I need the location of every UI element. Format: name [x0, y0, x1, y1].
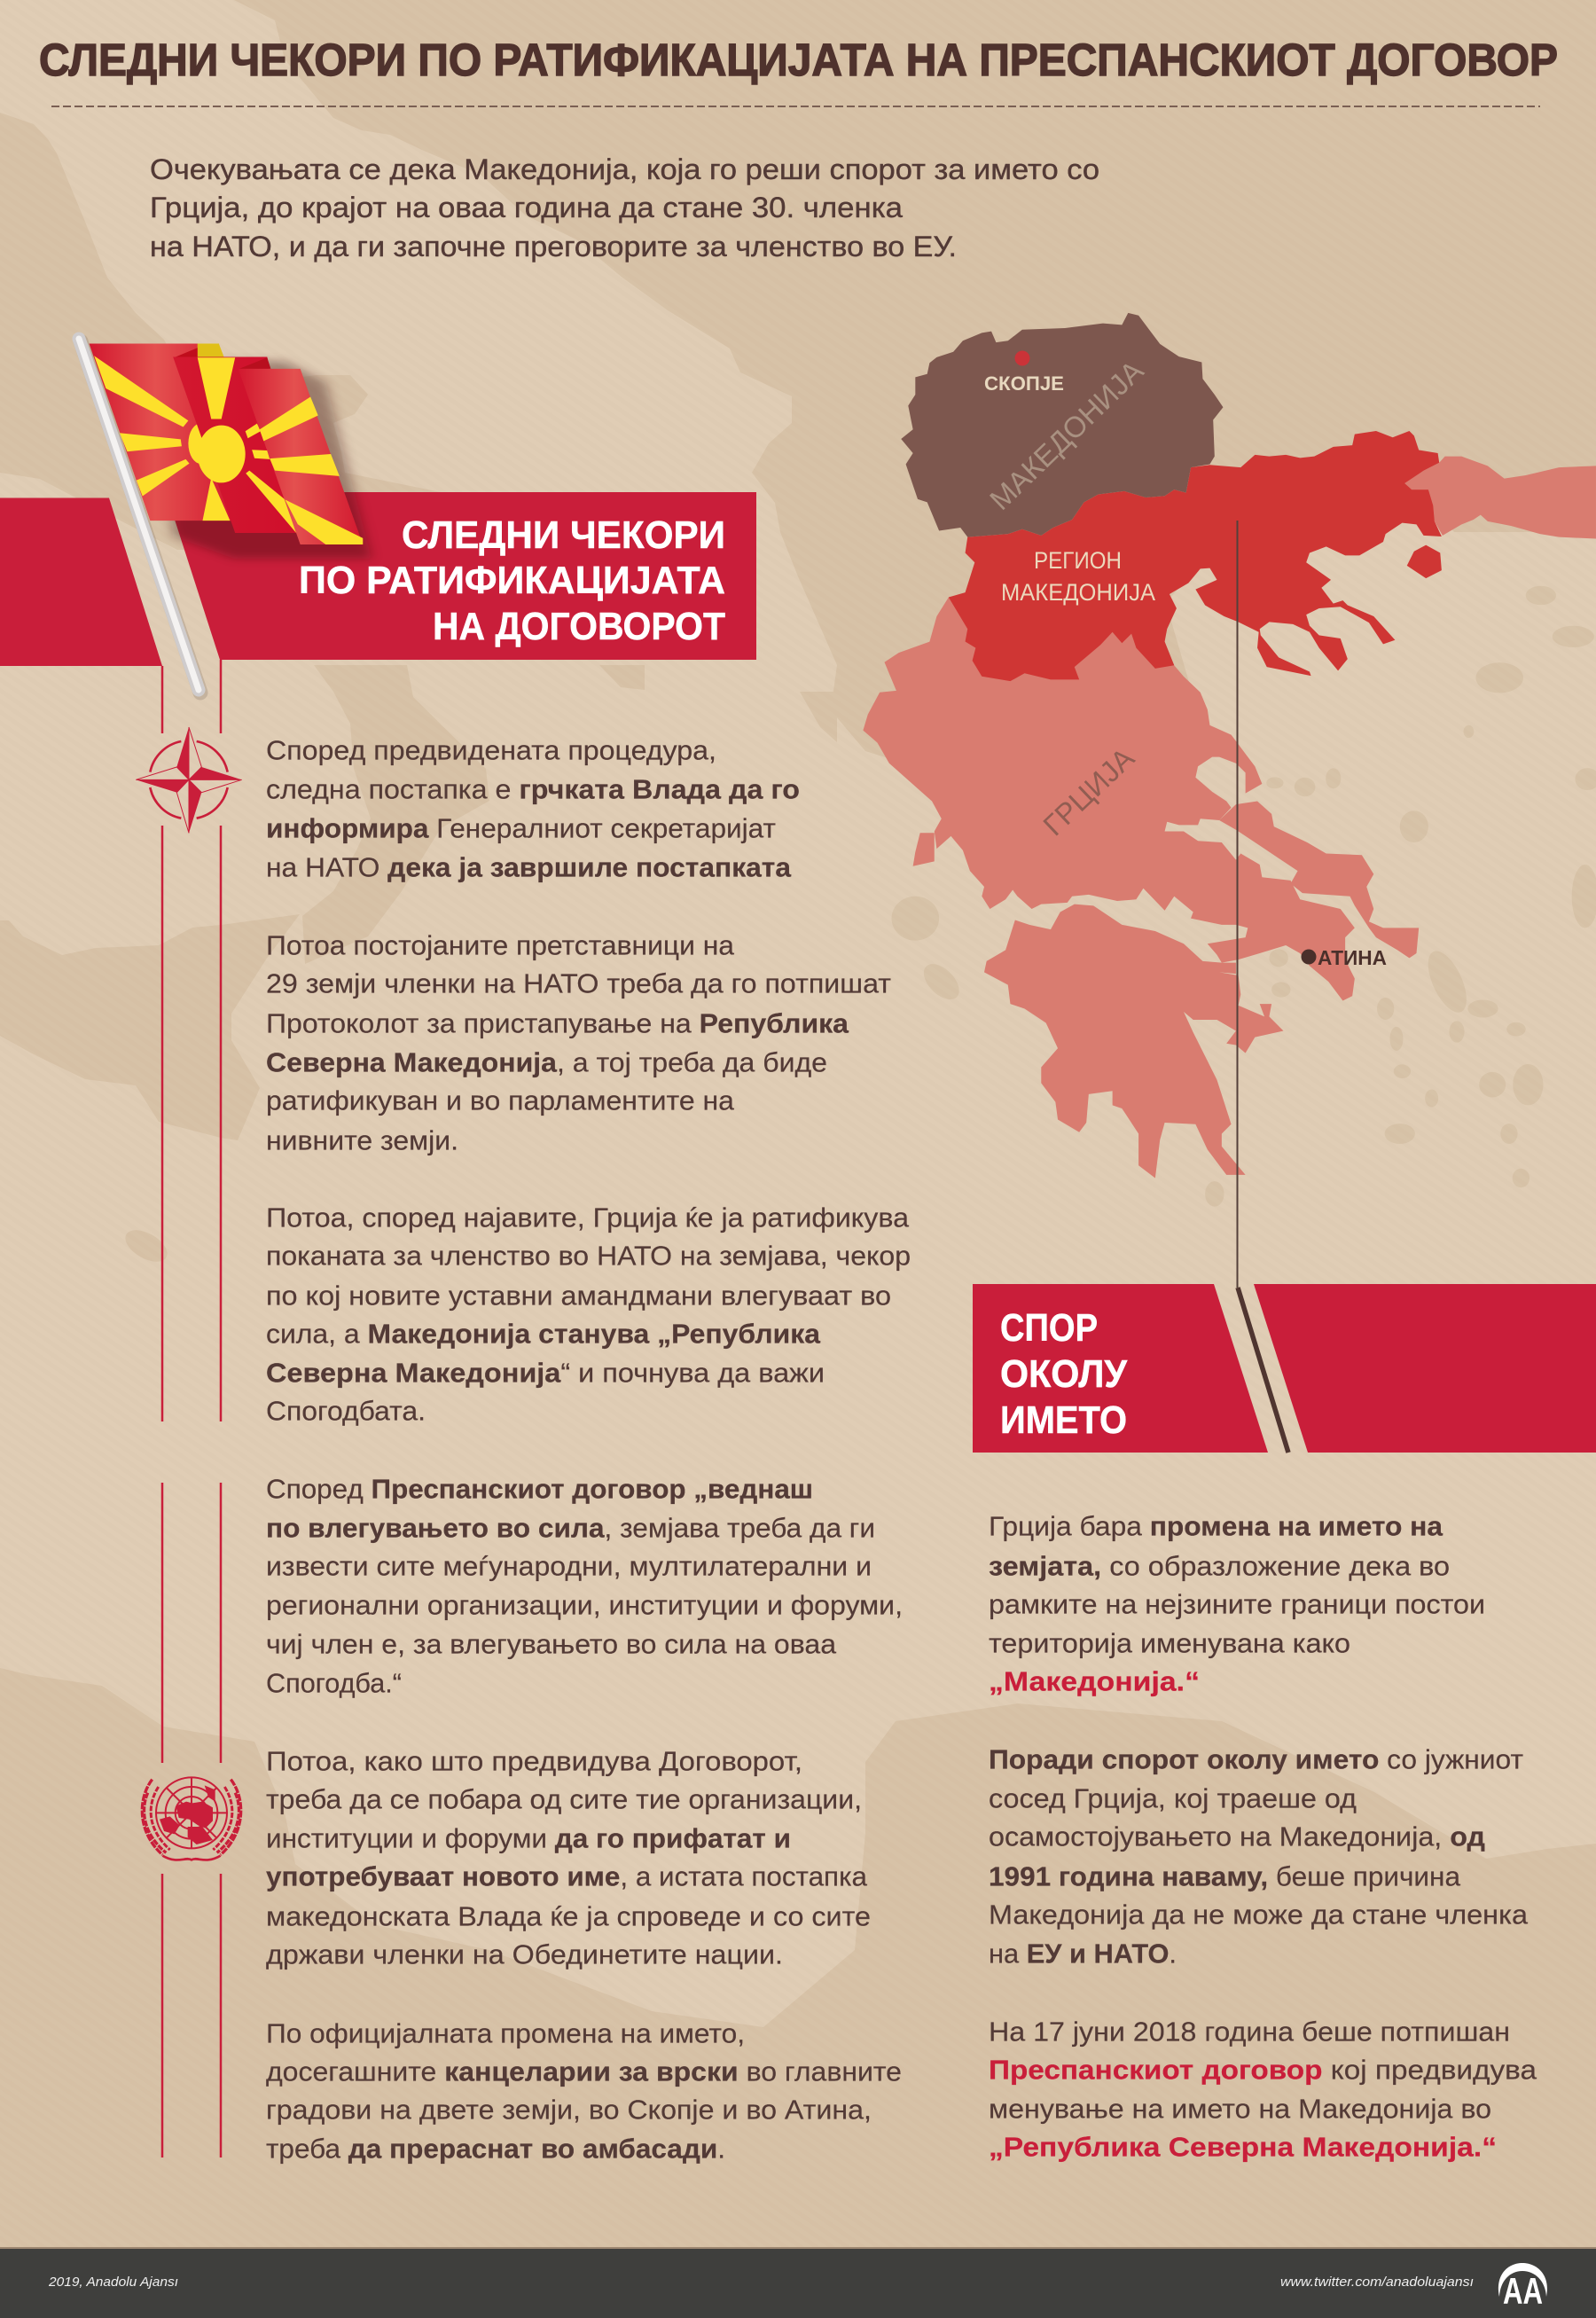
text block: procedure 4: Спогодба.“ — [266, 1667, 402, 1699]
intro text: Очекувањата се дека Македонија, која го реши спорот за името со — [150, 153, 1099, 185]
text block: procedure 4: чиј член е, за влегувањето во сила на оваа — [266, 1628, 837, 1660]
text block: procedure 5: институции и форуми да го прифатат и — [266, 1823, 791, 1853]
map: Greece and Thrace — [863, 583, 1419, 1179]
text block: procedure 3: Спогодбата. — [266, 1396, 426, 1426]
map: Macedonia — [901, 313, 1223, 537]
text block: procedure 2: Потоа постојаните претставници на — [266, 929, 735, 961]
text block: dispute 1: Грција бара промена на името на — [989, 1511, 1443, 1541]
text block: procedure 3: поканата за членство во НАТО на земјава, чекор — [266, 1240, 911, 1272]
text block: procedure 4 — [266, 1474, 903, 1699]
text block: procedure 5: Потоа, како што предвидува Договорот, — [266, 1745, 802, 1777]
heading: dispute over the name — [1000, 1306, 1128, 1442]
text block: dispute 2: Македонија да не може да стане членка — [989, 1899, 1529, 1930]
map label: Skopje: СКОПЈЕ — [984, 372, 1064, 395]
text block: dispute 3 — [989, 2017, 1537, 2162]
text block: procedure 2 — [266, 929, 891, 1156]
heading: next steps: СЛЕДНИ ЧЕКОРИ — [402, 513, 725, 557]
text block: procedure 5 — [266, 1745, 871, 1970]
footer credit: 2019, Anadolu Ajansı — [48, 2275, 178, 2290]
heading: dispute over the name: ОКОЛУ — [1000, 1352, 1128, 1396]
icon: United Nations emblem — [142, 1777, 241, 1860]
text block: procedure 1: Според предвидената процедура, — [266, 734, 716, 766]
text block: dispute 1: земјата, со образложение дека во — [989, 1550, 1450, 1582]
heading: dispute over the name: СПОР — [1000, 1306, 1098, 1350]
text block: procedure 3: по кој новите уставни амандмани влегуваат во — [266, 1280, 891, 1311]
text block: procedure 1: на НАТО дека ја завршиле постапката — [266, 851, 792, 883]
icon: Anadolu Agency logo: AA — [1503, 2270, 1543, 2312]
text block: dispute 2: осамостојувањето на Македонија, од — [989, 1821, 1485, 1852]
text block: procedure 6 — [266, 2018, 902, 2164]
intro text — [150, 153, 1099, 262]
text block: procedure 5: македонската Влада ќе ја спроведе и со сите — [266, 1901, 871, 1931]
text block: procedure 1 — [266, 734, 800, 883]
text block: procedure 6: досегашните канцеларии за врски во главните — [266, 2056, 902, 2087]
map label: Athens: АТИНА — [1318, 946, 1387, 969]
map label: region Macedonia — [1001, 547, 1155, 606]
text block: procedure 6: По официјалната промена на името, — [266, 2018, 745, 2048]
text block: dispute 2: Поради спорот околу името со јужниот — [989, 1743, 1523, 1775]
map label: Skopje — [984, 351, 1064, 395]
name dispute band — [973, 521, 1596, 1453]
text block: dispute 2: 1991 година наваму, беше причина — [989, 1860, 1461, 1892]
text block: procedure 1: следна постапка е грчката Влада да го — [266, 773, 800, 805]
text block: procedure 4: извести сите меѓународни, мултилатерални и — [266, 1550, 872, 1582]
text block: procedure 4: Според Преспанскиот договор „веднаш — [266, 1474, 813, 1504]
icon: NATO compass star — [136, 727, 242, 833]
heading: next steps — [299, 513, 725, 648]
icon: Anadolu Agency logo — [1498, 2263, 1547, 2312]
text block: procedure 3: Северна Македонија “ и почнува да важи — [266, 1357, 825, 1389]
footer url: www.twitter.com/anadoluajansı — [1280, 2275, 1474, 2290]
map — [863, 313, 1596, 1179]
heading: next steps: ПО РАТИФИКАЦИЈАТА — [299, 559, 725, 602]
text block: dispute 2 — [989, 1743, 1529, 1969]
text block: dispute 3: На 17 јуни 2018 година беше потпишан — [989, 2017, 1510, 2047]
text block: procedure 4: регионални организации, институции и форуми, — [266, 1589, 903, 1621]
text block: dispute 1: рамките на нејзините граници постои — [989, 1589, 1485, 1619]
text block: dispute 2: на ЕУ и НАТО. — [989, 1938, 1177, 1969]
intro text: на НАТО, и да ги започне преговорите за членство во ЕУ. — [150, 231, 957, 262]
text block: procedure 2: Протоколот за пристапување на Република — [266, 1007, 849, 1039]
footer bar — [0, 2247, 1596, 2318]
text block: dispute 3: „Република Северна Македонија.“ — [989, 2132, 1497, 2162]
text block: dispute 1: територија именувана како — [989, 1628, 1350, 1658]
text block: procedure 5: држави членки на Обединетите нации. — [266, 1938, 783, 1970]
text block: dispute 1: „Македонија.“ — [989, 1665, 1200, 1697]
text block: procedure 6: треба да прераснат во амбасади. — [266, 2134, 725, 2164]
text block: dispute 2: сосед Грција, кој траеше од — [989, 1782, 1357, 1814]
text block: procedure 2: ратификуван и во парламентите на — [266, 1085, 735, 1116]
text block: procedure 6: градови на двете земји, во Скопје и во Атина, — [266, 2095, 872, 2125]
text block: procedure 2: Северна Македонија , а тој треба да биде — [266, 1046, 827, 1078]
intro text: Грција, до крајот на оваа година да стане 30. членка — [150, 192, 903, 223]
text block: procedure 5: треба да се побара од сите тие организации, — [266, 1784, 862, 1814]
heading: next steps: НА ДОГОВОРОТ — [433, 605, 725, 648]
text block: procedure 3: Потоа, според најавите, Грција ќе ја ратификува — [266, 1202, 910, 1233]
text block: procedure 3 — [266, 1202, 911, 1426]
text block: procedure 5: употребуваат новото име, а истата постапка — [266, 1860, 868, 1892]
flag of Macedonia with pole — [79, 339, 372, 693]
text block: procedure 1: информира Генералниот секретаријат — [266, 812, 776, 844]
map label: Macedonia country: МАКЕДОНИЈА — [983, 354, 1149, 516]
map label: region Macedonia: РЕГИОН — [1034, 547, 1122, 574]
heading: dispute over the name: ИМЕТО — [1000, 1398, 1127, 1442]
text block: dispute 3: Преспанскиот договор кој предвидува — [989, 2054, 1537, 2086]
text block: dispute 3: менување на името на Македонија во — [989, 2093, 1491, 2125]
text block: dispute 1 — [989, 1511, 1485, 1697]
red header band — [0, 492, 756, 666]
text block: procedure 2: 29 земји членки на НАТО треба да го потпишат — [266, 968, 891, 998]
text block: procedure 4: по влегувањето во сила, земјава треба да ги — [266, 1513, 875, 1543]
map label: region Macedonia: МАКЕДОНИЈА — [1001, 579, 1155, 606]
map: region Macedonia — [949, 431, 1442, 681]
map label: Greece: ГРЦИЈА — [1037, 741, 1140, 842]
text block: procedure 2: нивните земји. — [266, 1124, 458, 1156]
text block: procedure 3: сила, а Македонија станува „Република — [266, 1318, 821, 1350]
